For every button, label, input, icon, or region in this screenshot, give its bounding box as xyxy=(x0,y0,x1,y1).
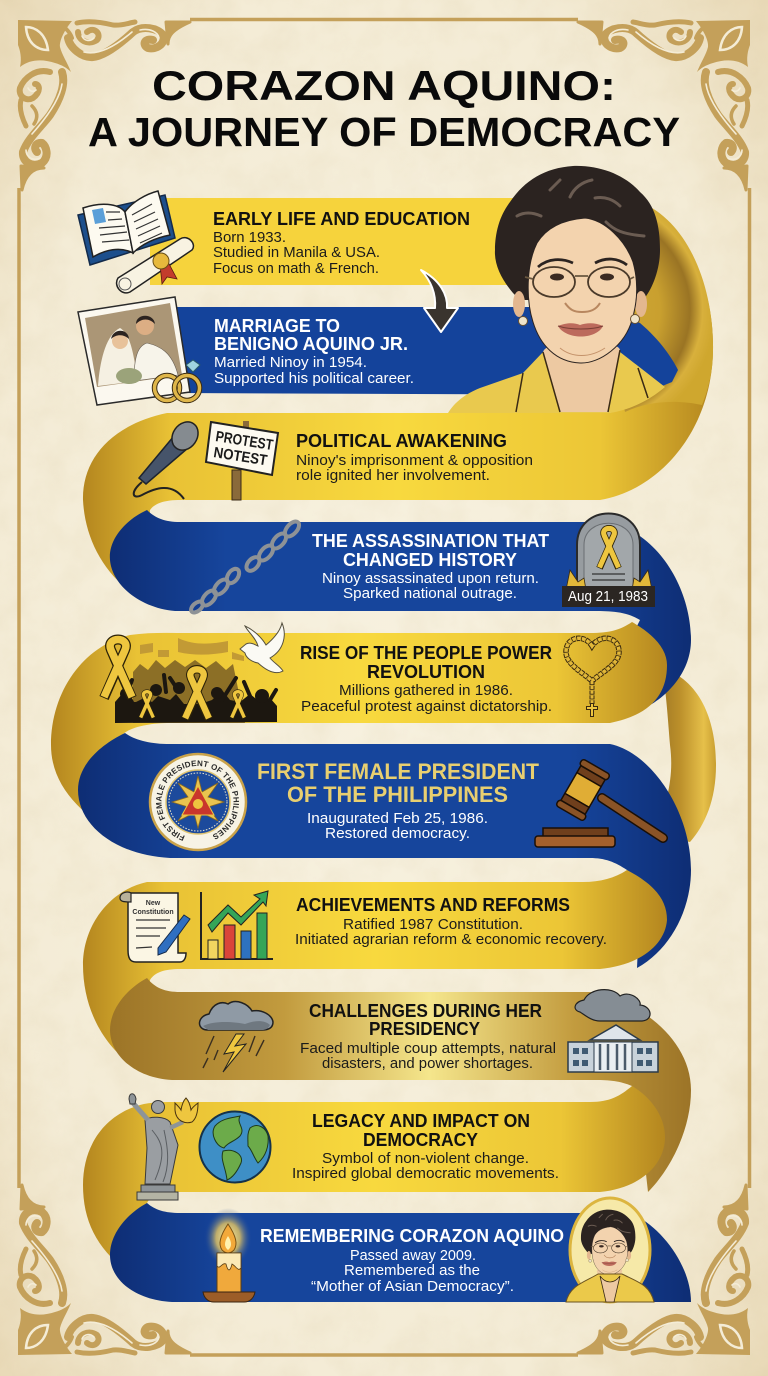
panel: early life and education xyxy=(78,191,470,293)
ornament: bottom-right corner xyxy=(578,1185,750,1355)
body text: Initiated agrarian reform & economic recovery. xyxy=(295,931,607,948)
heading xyxy=(257,759,540,807)
icon: constitution scroll: Constitution xyxy=(132,909,174,916)
body text: Restored democracy. xyxy=(325,825,470,842)
heading: FIRST FEMALE PRESIDENT xyxy=(257,759,540,784)
panel: achievements xyxy=(120,891,607,962)
body text: Peaceful protest against dictatorship. xyxy=(301,698,552,715)
body text: “Mother of Asian Democracy”. xyxy=(311,1278,514,1295)
icon: gavel xyxy=(535,759,663,847)
body text xyxy=(311,1247,514,1295)
body text: Symbol of non-violent change. xyxy=(322,1150,529,1167)
heading: ACHIEVEMENTS AND REFORMS xyxy=(296,895,570,915)
icon: presidential seal: FIRST FEMALE PRESIDENT OF THE PHILIPPINES xyxy=(156,760,240,841)
body text: Ninoy assassinated upon return. xyxy=(322,570,539,587)
icon: constitution scroll xyxy=(120,892,190,962)
icon: protest sign: PROTEST xyxy=(214,428,274,454)
heading: PRESIDENCY xyxy=(369,1019,480,1039)
ribbon: band 4 blue xyxy=(110,510,691,708)
icon: wedding rings xyxy=(154,360,200,400)
icon: building under clouds xyxy=(568,990,658,1072)
body text: Supported his political career. xyxy=(214,370,414,387)
heading: LEGACY AND IMPACT ON xyxy=(312,1111,530,1131)
icon: protest sign: NOTEST xyxy=(212,444,268,469)
date label: Aug 21, 1983 xyxy=(568,589,648,605)
icon: statue xyxy=(129,1094,198,1200)
panel: remembering xyxy=(203,1198,654,1302)
body text: disasters, and power shortages. xyxy=(322,1055,533,1072)
body text xyxy=(292,1150,559,1182)
icon: protest sign xyxy=(206,421,278,500)
body text xyxy=(300,1040,556,1072)
heading: EARLY LIFE AND EDUCATION xyxy=(213,209,470,229)
body text: Inaugurated Feb 25, 1986. xyxy=(307,810,488,827)
portrait jacket xyxy=(448,352,665,413)
panel: political awakening xyxy=(134,417,533,500)
icon: constitution scroll: New xyxy=(146,900,161,907)
heading: OF THE PHILIPPINES xyxy=(287,782,508,807)
body text: Remembered as the xyxy=(344,1262,480,1279)
heading: CHALLENGES DURING HER xyxy=(309,1001,542,1021)
heading: DEMOCRACY xyxy=(363,1130,478,1150)
body text: role ignited her involvement. xyxy=(296,467,490,484)
body text: Ninoy's imprisonment & opposition xyxy=(296,452,533,469)
portrait: Corazon Aquino xyxy=(448,166,665,413)
ornament: top-right corner xyxy=(578,20,750,190)
body text: Millions gathered in 1986. xyxy=(339,682,513,699)
icon: open book xyxy=(78,191,175,265)
ribbon fold: right of portrait into band 3 xyxy=(83,198,713,605)
ribbon: band 10 blue xyxy=(110,1203,691,1302)
icon: storm cloud xyxy=(199,1002,273,1072)
ribbon: band 5 yellow xyxy=(51,622,667,840)
icon: dove xyxy=(240,623,284,673)
heading xyxy=(300,643,552,682)
body text xyxy=(307,810,488,842)
icon: wedding photo xyxy=(78,297,190,405)
portrait collar lines xyxy=(516,350,648,412)
arrow: band 1 to band 2 xyxy=(421,270,458,332)
title xyxy=(88,62,680,155)
icon: candle xyxy=(203,1208,255,1302)
title: A JOURNEY OF DEMOCRACY xyxy=(88,109,680,155)
icon: broken chain xyxy=(189,519,302,615)
title: CORAZON AQUINO: xyxy=(152,62,616,109)
panel: marriage xyxy=(78,297,414,405)
icon: rosary xyxy=(566,638,619,717)
heading: POLITICAL AWAKENING xyxy=(296,431,507,451)
heading xyxy=(312,1111,530,1150)
icon: crowd with ribbons xyxy=(104,638,277,723)
body text: Passed away 2009. xyxy=(350,1247,476,1264)
heading xyxy=(309,1001,542,1039)
body text xyxy=(301,682,552,715)
panel: challenges xyxy=(199,990,658,1072)
heading: THE ASSASSINATION THAT xyxy=(312,531,549,551)
ribbon: band 2 blue xyxy=(175,307,678,395)
panel: legacy xyxy=(129,1094,559,1200)
body text: Faced multiple coup attempts, natural xyxy=(300,1040,556,1057)
ornament: top-left corner xyxy=(18,20,190,190)
body text xyxy=(322,570,539,602)
portrait head xyxy=(495,166,660,412)
body text xyxy=(295,916,607,948)
ornament: bottom-left corner xyxy=(18,1185,190,1355)
icon: microphone xyxy=(134,417,203,499)
body text: Sparked national outrage. xyxy=(343,585,517,602)
icon: gravestone xyxy=(566,514,652,590)
body text: Ratified 1987 Constitution. xyxy=(343,916,523,933)
heading: RISE OF THE PEOPLE POWER xyxy=(300,643,552,663)
body text: Inspired global democratic movements. xyxy=(292,1165,559,1182)
ribbon: band 1 yellow xyxy=(150,198,560,285)
heading: MARRIAGE TO xyxy=(214,316,340,336)
body text: Studied in Manila & USA. xyxy=(213,244,380,261)
heading xyxy=(214,316,408,354)
body text xyxy=(214,354,414,387)
icon: growth chart xyxy=(201,891,273,959)
ribbon: band 6 blue xyxy=(78,733,691,968)
heading: BENIGNO AQUINO JR. xyxy=(214,334,408,354)
icon: diploma xyxy=(117,238,193,293)
ribbon: band 9 yellow xyxy=(83,1086,665,1280)
body text xyxy=(296,452,533,484)
panel: assassination xyxy=(189,514,655,615)
body text: Born 1933. xyxy=(213,229,286,246)
ribbon fold: shaded crescent at top right xyxy=(600,202,713,412)
ribbon: band 8 challenges xyxy=(110,978,691,1192)
heading: REVOLUTION xyxy=(367,662,485,682)
icon: halo portrait xyxy=(566,1198,654,1302)
ribbon: band 7 yellow xyxy=(83,870,667,1070)
icon: globe xyxy=(200,1112,270,1182)
heading: CHANGED HISTORY xyxy=(343,550,517,570)
heading xyxy=(312,531,549,570)
heading: REMEMBERING CORAZON AQUINO xyxy=(260,1226,564,1246)
body text: Married Ninoy in 1954. xyxy=(214,354,367,371)
panel: first female president xyxy=(148,752,668,852)
body text: Focus on math & French. xyxy=(213,260,379,277)
panel: people power xyxy=(104,623,619,723)
body text xyxy=(213,229,380,277)
ribbon fold: band 5 to 7 right side xyxy=(655,668,716,842)
